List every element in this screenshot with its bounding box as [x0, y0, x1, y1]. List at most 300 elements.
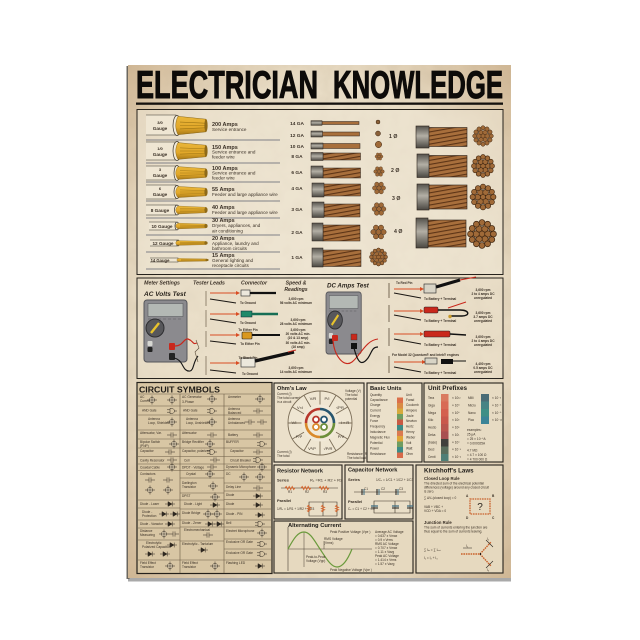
Ohm's law notes: Resistance (R)	[347, 452, 368, 456]
units table: Potential	[370, 441, 383, 445]
aught labels: 4 Ø	[394, 229, 402, 235]
parallel capacitors	[348, 499, 413, 513]
symbol labels column 1: Diode - Laser	[140, 502, 160, 506]
units table: Weber	[406, 436, 416, 440]
prefix names: Mega	[428, 411, 436, 415]
panel: Kirchhoff's laws	[416, 465, 503, 573]
wire row: 3 gauge: Service entrance and	[212, 170, 256, 176]
symbol labels column 1: Loop, Shielded	[148, 421, 169, 425]
symbol labels column 3: Dynamic Microphone	[226, 465, 256, 469]
column headings: Meter Settings	[144, 280, 180, 286]
series resistors: Series	[277, 478, 290, 482]
symbol labels column 2: Transistor	[182, 485, 197, 489]
DC readings: unregulated	[474, 296, 492, 300]
symbol labels column 1: Field Effect	[140, 561, 156, 565]
units table: Force	[370, 419, 378, 423]
AC readings: 56 volts AC minimum	[280, 301, 312, 305]
series resistors: R3	[323, 490, 327, 494]
junction diagram	[461, 537, 493, 572]
symbol labels column 3: Bell	[226, 521, 232, 525]
symbol labels column 3: Antenna	[228, 407, 240, 411]
DC readings: unregulated	[474, 370, 492, 374]
column headings: Tester Leads	[193, 280, 225, 286]
Ohm's law notes: The total	[345, 393, 358, 397]
series resistors: Rₛ =R1 + R2 + R3	[310, 478, 343, 482]
panel: unit prefixes	[424, 383, 503, 462]
symbol labels column 2: AND Gate	[183, 408, 198, 412]
AC chart labels: RMS Voltage	[324, 537, 343, 541]
closed loop rule: is zero.	[424, 490, 434, 494]
symbol labels column 1: Electrolytic	[146, 541, 162, 545]
series capacitors: 1/Cₛ = 1/C1 + 1/C2 + 1/C3	[376, 478, 413, 482]
symbol labels column 1: Bipolar Switch	[140, 440, 160, 444]
symbol labels column 2: Bridge Rectifier	[182, 440, 205, 444]
Ohm's law wheel: V/I	[292, 420, 296, 425]
DC readings: 3,600 rpm	[476, 335, 491, 339]
wire row: 12 gauge: 20 Amps	[212, 236, 235, 242]
series resistors: R1	[288, 490, 292, 494]
wire row: 6 gauge: Feeder and large appliance wire	[212, 192, 278, 197]
prefix names: Giga	[428, 404, 435, 408]
prefix examples: 25 μA	[467, 432, 476, 436]
Ohm's law wheel: P/V	[338, 434, 345, 439]
AC readings: 3,600 rpm	[289, 366, 304, 370]
symbol labels column 2: Transistor	[182, 565, 197, 569]
DC connectors	[424, 277, 476, 364]
wire row: 3 gauge: 3	[159, 167, 162, 172]
AC chart labels: Peak Negative Voltage (Vpe )	[330, 568, 372, 572]
AC sine chart	[288, 527, 372, 571]
closed loop rule: VCD + VDA = 0	[424, 509, 446, 513]
closed loop rule: differences (voltage) around any closed circuit	[424, 486, 489, 490]
closed loop rule: ∑ ΔVₖ(closed loop) = 0	[424, 496, 456, 500]
AC formulas: RMS AC Voltage	[375, 542, 399, 546]
gauge labels	[290, 121, 304, 261]
units table: Watt	[406, 446, 413, 450]
symbol labels column 3: Exclusive OR Gate	[226, 551, 253, 555]
AC readings: 3,600 rpm	[291, 318, 306, 322]
prefix names: × 10³	[452, 418, 459, 422]
wire row: 8 gauge: Feeder and large appliance wire	[212, 210, 278, 215]
unit prefixes heading: Unit Prefixes	[428, 385, 468, 392]
gauge separator lines	[146, 140, 280, 269]
DC connector labels: To Battery + Terminal	[424, 371, 456, 375]
symbol labels column 2: Diode Bridge	[182, 511, 201, 515]
wire row: 10 gauge: Dryers, appliances, and	[212, 223, 261, 228]
series capacitors	[348, 477, 413, 495]
gauge labels: 12 GA	[290, 133, 304, 139]
prefix names: Deci	[428, 448, 435, 452]
symbol labels column 1: Current	[140, 399, 151, 403]
symbol labels column 1: Antenna	[148, 417, 160, 421]
units table: Ampere	[406, 408, 417, 412]
panel: alternating current	[274, 521, 413, 573]
Ohm's law notes: Current (I)	[277, 392, 292, 396]
symbol labels column 1: AC	[140, 395, 145, 399]
AC connector labels: To Either Pin	[240, 342, 260, 346]
units table: Magnetic Flux	[370, 436, 390, 440]
units table: Capacitance	[370, 398, 388, 402]
wire row: 8 gauge	[146, 205, 278, 215]
Ohm's law notes: Voltage (V)	[345, 389, 361, 393]
AC readings: 14 volts AC minimum	[280, 370, 312, 374]
column headings: Speed &	[286, 280, 307, 286]
symbol labels column 2: Diode - Zener	[182, 521, 202, 525]
units table: Coulomb	[406, 403, 419, 407]
closed loop rule: Closed Loop Rule	[424, 476, 460, 481]
wire row: 10 gauge	[149, 218, 261, 234]
wire row: 1/0 gauge: 1/0	[157, 146, 164, 151]
Ohm's law notes: The total	[277, 454, 290, 458]
symbol labels column 3: Electret Microphone	[226, 529, 255, 533]
units table: Henry	[406, 430, 415, 434]
gauge labels: 10 GA	[290, 144, 304, 150]
Ohm's law wheel	[288, 391, 352, 455]
units table: Energy	[370, 414, 381, 418]
symbol grid lines	[138, 394, 271, 573]
symbol labels column 1: Protection	[142, 514, 157, 518]
DC readings: unregulated	[474, 343, 492, 347]
AC readings: 20 volts AC min.	[286, 332, 310, 336]
wire row: 12 gauge: 12 Gauge	[152, 241, 174, 246]
symbol labels column 2: Attenuator	[182, 431, 198, 435]
prefix names: Centi	[428, 455, 436, 459]
poster background	[128, 65, 511, 578]
Ohm's law wheel: V²/P	[308, 446, 316, 451]
AC readings: 3,600 rpm	[289, 297, 304, 301]
symbol labels column 1: Measuring	[140, 533, 155, 537]
units table: Quantity	[370, 393, 382, 397]
prefix names: × 10¹²	[452, 396, 460, 400]
aught labels: 3 Ø	[392, 196, 400, 202]
small copper wires	[311, 121, 361, 267]
junction diagram: I₂	[487, 537, 490, 541]
canvas print edge and shadow	[126, 66, 511, 582]
DC readings	[471, 288, 495, 374]
wire row: 3 gauge: 100 Amps	[212, 166, 238, 172]
closed loop rule: VAB + VBC +	[424, 505, 443, 509]
symbol labels column 2: Diode - Light	[184, 502, 202, 506]
series resistors: R2	[305, 490, 309, 494]
wire row: 14 gauge: General lighting and	[212, 258, 254, 263]
closed loop rule: The directed sum of the electrical potential	[424, 482, 484, 486]
DC connector labels	[392, 281, 459, 375]
units table: Charge	[370, 403, 381, 407]
title: KNOWLEDGE	[333, 64, 503, 107]
series resistors	[277, 478, 343, 494]
prefix names: × 10⁰	[452, 440, 460, 444]
column headings: Readings	[284, 287, 308, 293]
prefix names: × 10⁻¹²	[492, 418, 502, 422]
circuit symbols heading: CIRCUIT SYMBOLS	[139, 386, 221, 394]
DC multimeter	[326, 283, 389, 373]
Ohm's law notes: The total current	[277, 396, 300, 400]
large cross-sections	[468, 126, 496, 248]
aught labels	[389, 134, 402, 235]
closed loop diagram: C	[492, 516, 495, 520]
symbol labels column 1: Capacitor	[140, 449, 155, 453]
panel: meter tests	[137, 277, 503, 378]
prefix names: × 10¹	[452, 433, 459, 437]
DC readings: 0.5 amps DC	[473, 366, 493, 370]
prefix chips	[441, 394, 489, 461]
wire row: 3/0 gauge	[146, 115, 247, 136]
DC readings: unregulated	[474, 319, 492, 323]
closed loop diagram: B	[492, 494, 495, 498]
unit colour chips	[397, 398, 403, 458]
symbol labels column 3: DC	[226, 472, 231, 476]
DC connector labels: To Battery + Terminal	[424, 319, 456, 323]
column headings	[144, 280, 308, 293]
wire row: 8 gauge: 8 Gauge	[151, 208, 170, 213]
units table: Joule	[406, 414, 414, 418]
DC readings: 3.7 amps DC	[473, 315, 493, 319]
Ohm's law wheel: √P/R	[324, 446, 333, 451]
AC readings: 30 volts AC min.	[286, 341, 310, 345]
junction diagram: I₃	[487, 568, 490, 572]
prefix names: (base)	[428, 440, 437, 444]
symbol labels column 3: Exclusive OR Gate	[226, 540, 253, 544]
Ohm's law wheel: P/I	[325, 396, 329, 401]
AC test leads arrows	[210, 291, 240, 373]
wire row: 12 gauge: bathroom circuits	[212, 246, 248, 251]
Ohm's law heading: Ohm's Law	[277, 386, 307, 392]
AC connector labels: To Black Pin	[239, 356, 257, 360]
Ohm's law wheel: √PR	[336, 405, 344, 410]
wire row: 10 gauge: 10 Gauge	[151, 224, 173, 229]
Ohm's law notes: Current (I)	[277, 450, 292, 454]
symbol labels column 1: AND Gate	[142, 408, 157, 412]
prefix examples: examples:	[467, 428, 482, 432]
AC formulas: Average AC Voltage	[375, 530, 404, 534]
AC formulas: = 0.707 x Vmax	[375, 546, 398, 550]
AC formulas: Peak AC Voltage	[375, 554, 399, 558]
symbol labels column 1: Attenuator, Var.	[140, 431, 162, 435]
symbol labels column 2: Crystal	[186, 472, 196, 476]
DC readings: 2 to 4 amps DC	[471, 292, 495, 296]
panel: wire gauges	[137, 110, 503, 274]
symbol labels column 3: Unbalanced	[228, 421, 245, 425]
AC connector labels: To Ground	[242, 372, 258, 376]
AC formulas	[375, 530, 404, 566]
wire row: 8 gauge: 40 Amps	[212, 205, 235, 211]
symbol labels column 1: Cavity Resonator	[140, 458, 165, 462]
Ohm's law notes: The total load	[347, 456, 367, 460]
prefix names: × 10⁹	[452, 404, 460, 408]
wire row: 10 gauge: air conditioning	[212, 228, 243, 234]
junction diagram: I₁	[466, 544, 468, 548]
AC volts test heading: AC Volts Test	[143, 291, 187, 298]
symbol labels column 2: DPDT - Voltage	[182, 466, 204, 470]
symbol labels column 3: Delay Line	[226, 485, 241, 489]
AC readings: (10 & 13 amp)	[288, 336, 308, 340]
AC connector labels: To Either Pin	[238, 328, 258, 332]
symbol labels column 2: AC Generator	[182, 395, 203, 399]
Ohm's law wheel: I × R	[341, 420, 349, 425]
units table: Ohm	[406, 452, 413, 456]
series capacitors: C2	[381, 487, 385, 491]
symbol labels column 2: Field Effect	[182, 561, 198, 565]
gauge labels: 1 GA	[291, 255, 303, 261]
units table	[370, 393, 419, 456]
AC chart labels: Peak Positive Voltage (Vpe )	[330, 530, 370, 534]
prefix examples: = 0.000025A	[467, 442, 486, 446]
junction rule: ∑ Iᵢₙ = ∑ Iₒᵤₜ	[424, 548, 441, 552]
wire row: 6 gauge: 6	[159, 186, 162, 191]
column headings: Connector	[241, 280, 268, 286]
AC chart labels	[306, 530, 372, 572]
AC formulas: = 1.414 x Vrms	[375, 558, 397, 562]
AC connector labels: To Ground	[240, 301, 256, 305]
closed loop diagram	[466, 494, 495, 520]
basic units heading: Basic Units	[370, 386, 402, 392]
AC chart labels: Voltage (Vpp)	[306, 559, 325, 563]
wire row: 14 gauge: receptacle circuits	[212, 263, 249, 268]
panel: resistor network	[274, 465, 343, 519]
DC readings: 2 to 4 amps DC	[471, 339, 495, 343]
Ohm's law notes: in a circuit	[277, 400, 291, 404]
AC connector labels: To Ground	[240, 321, 256, 325]
series capacitors: C3	[399, 487, 403, 491]
closed loop rule	[424, 476, 489, 513]
title: ELECTRICIAN	[136, 64, 318, 107]
wire row: 1/0 gauge: feeder wire	[212, 154, 235, 160]
symbol labels column 3: Diode	[226, 493, 235, 497]
AC chart labels: (Vrms)	[324, 541, 333, 545]
wire row: 1/0 gauge	[146, 142, 256, 160]
symbol labels column 1: Coaxial Cable	[140, 466, 160, 470]
units table: Volt	[406, 441, 411, 445]
junction rule: The sum of currents entering the junction are	[424, 526, 488, 530]
gauge labels: 2 GA	[291, 230, 303, 236]
prefix names: Tera	[428, 396, 434, 400]
prefix names: Kilo	[428, 418, 434, 422]
aught labels: 1 Ø	[389, 134, 397, 140]
wire row: 3/0 gauge: Service entrance	[212, 127, 247, 132]
wire row: 14 gauge	[150, 253, 254, 268]
units table: Farad	[406, 398, 415, 402]
DC connector labels: To Battery + Terminal	[424, 343, 456, 347]
closed loop diagram: ?	[477, 502, 483, 513]
wire row: 6 gauge	[146, 185, 278, 199]
prefix examples: = 4 700 000 Ω	[467, 458, 488, 462]
gauge labels: 6 GA	[291, 170, 303, 176]
gauge labels: 8 GA	[291, 154, 303, 160]
symbol labels column 3: Capacitor	[230, 449, 245, 453]
panel: basic units	[367, 383, 422, 462]
capacitor network heading: Capacitor Network	[348, 468, 398, 474]
wire row: 3/0 gauge: Gauge	[153, 126, 168, 131]
wire row: 1/0 gauge: Service entrance and	[212, 150, 256, 154]
alternating current heading: Alternating Current	[288, 523, 341, 529]
prefix names: × 10²	[452, 426, 459, 430]
wire row: 10 gauge: 30 Amps	[212, 218, 235, 224]
wire row: 6 gauge: Gauge	[153, 192, 168, 197]
symbol labels column 2: 3-Phase	[182, 400, 194, 404]
wire row: 1/0 gauge: 150 Amps	[212, 145, 238, 151]
symbol labels column 3: BUFFER	[226, 440, 239, 444]
prefix names: × 10⁻⁶	[492, 404, 502, 408]
wire row: 3 gauge: feeder wire	[212, 176, 235, 180]
symbol labels column 3: Antenna	[228, 417, 240, 421]
wire cross-sections	[369, 120, 388, 266]
symbol labels column 1: Diode - Varactor	[140, 522, 164, 526]
series capacitors: Series	[348, 477, 361, 482]
DC connector labels: For Model 32 Quantum® and Intek® engines	[392, 353, 459, 357]
symbol labels column 2: Darlington	[182, 481, 197, 485]
symbol labels column 2: Electromechanical	[184, 528, 210, 532]
series capacitors: C1	[364, 487, 368, 491]
gauge labels: 4 GA	[291, 186, 303, 192]
symbol labels column 3: Ammeter	[228, 395, 242, 399]
units table: Power	[370, 446, 380, 450]
DC connector labels: To Red Pin	[396, 281, 412, 285]
wire row: 12 gauge: Appliance, laundry and	[212, 241, 259, 246]
prefix examples: 4.7 MΩ	[467, 448, 478, 452]
junction rule	[424, 520, 488, 560]
wire row: 12 gauge	[150, 236, 259, 251]
symbol labels column 1: Contactors	[140, 472, 156, 476]
wire row: 3/0 gauge: 200 Amps	[212, 122, 238, 128]
units table: Unit	[406, 393, 412, 397]
panel: circuit symbols	[137, 382, 272, 574]
prefix names	[428, 396, 502, 459]
parallel resistors: Parallel	[277, 498, 291, 503]
gauge labels: 3 GA	[291, 207, 303, 213]
prefix names: Micro	[468, 404, 476, 408]
symbol glyphs	[145, 394, 267, 570]
Ohm's law notes: potential	[345, 397, 357, 401]
symbol labels column 3: Diode - PIN	[226, 512, 243, 516]
junction rule: thus equal to the sum of currents leaving.	[424, 530, 482, 534]
DC connector labels: To Battery + Terminal	[424, 297, 456, 301]
AC multimeter	[144, 291, 206, 375]
symbol labels column 3: Balanced	[228, 411, 242, 415]
symbol labels column 1: Distance	[140, 529, 153, 533]
AC formulas: = 0.9 x Vrms	[375, 538, 393, 542]
parallel capacitors: Cₛ = C1 + C2 + C3	[348, 507, 375, 511]
DC amps test heading: DC Amps Test	[327, 282, 370, 290]
symbol labels column 3: Circuit Breaker	[230, 458, 252, 462]
wire row: 3 gauge	[146, 166, 256, 180]
AC formulas: = 0.637 x Vmax	[375, 534, 398, 538]
units table: Newton	[406, 419, 417, 423]
prefix names: × 10⁻⁹	[492, 411, 502, 415]
prefix names: × 10⁻¹	[452, 448, 461, 452]
units table: Current	[370, 408, 381, 412]
parallel resistors	[277, 498, 338, 516]
Kirchhoff heading: Kirchhoff's Laws	[424, 468, 474, 474]
symbol labels column 3	[226, 395, 256, 565]
junction rule: I₁ = I₂ + I₃	[424, 556, 438, 560]
Ohm's law wheel: P/I²	[296, 434, 303, 439]
symbol labels column 2: Loop, Unshielded	[186, 421, 211, 425]
prefix names: × 10⁻³	[492, 396, 501, 400]
AC formulas: = 1.11 x Vavg	[375, 550, 394, 554]
DC readings: 4,400 rpm	[476, 362, 491, 366]
prefix names: Pico	[468, 418, 474, 422]
AC formulas: = 1.57 x Vavg	[375, 562, 395, 566]
AC connector labels	[238, 301, 260, 376]
DC readings: 3,600 rpm	[476, 288, 491, 292]
prefix examples: = 4.7 × 100 Ω	[467, 453, 487, 457]
parallel capacitors: Parallel	[348, 499, 362, 504]
AC chart labels: Peak-to-Peak	[306, 555, 326, 559]
AC readings: (16 amp)	[291, 345, 305, 349]
DC readings: 3,600 rpm	[476, 311, 491, 315]
symbol labels column 1	[140, 395, 171, 569]
wire row: 14 gauge: 15 Amps	[212, 253, 235, 259]
